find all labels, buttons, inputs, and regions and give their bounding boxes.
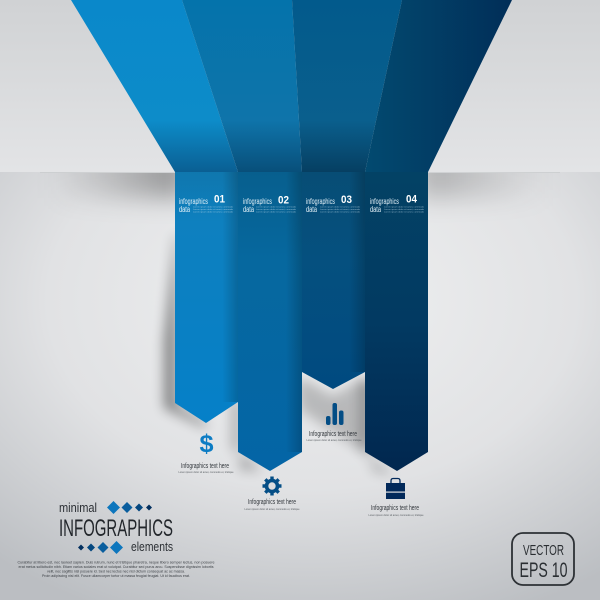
main title: INFOGRAPHICS	[59, 515, 173, 542]
ribbon 2	[238, 172, 302, 471]
ribbon 1: Lorem ipsum dolor sit amet, commodo	[193, 206, 233, 208]
logo block	[18, 500, 214, 578]
ribbon 2: 02	[278, 194, 289, 206]
ribbon 4: Lorem ipsum dolor sit amet, commodo	[384, 208, 424, 211]
caption 4: Lorem ipsum dolor sit amet, commodo et, tristique	[368, 513, 424, 517]
caption 2: Lorem ipsum dolor sit amet, commodo et, tristique	[244, 507, 300, 511]
ribbon 2: data	[243, 205, 254, 214]
ribbon 3: infographics	[306, 197, 335, 206]
caption 2	[244, 499, 300, 511]
ribbon 1: infographics	[179, 197, 208, 206]
caption 4	[368, 505, 424, 517]
band 3	[292, 0, 402, 172]
body paragraph: erat metus sollicitudin nibh. Etiam varius sodales erat ut volutpat. Curabitur sed purus arcu. Suspendisse dignissim lobortis	[18, 565, 214, 569]
band 1	[71, 0, 238, 172]
top fan bands	[71, 0, 512, 172]
ribbon 3: Lorem ipsum dolor sit amet, commodo	[320, 210, 360, 214]
caption 3: Lorem ipsum dolor sit amet, commodo et, tristique	[306, 438, 362, 442]
caption 3	[306, 431, 362, 442]
caption 3: Infographics text here	[309, 431, 357, 438]
ribbon 2: Lorem ipsum dolor sit amet, commodo	[256, 206, 296, 208]
ribbon 3: 03	[341, 194, 352, 206]
icon: briefcase	[386, 478, 405, 499]
ribbon 1: Lorem ipsum dolor sit amet, commodo	[193, 208, 233, 211]
band 2	[182, 0, 302, 172]
top diamonds	[107, 501, 152, 514]
ribbon 1: data	[179, 205, 190, 214]
bottom diamonds	[78, 541, 123, 554]
word: minimal: minimal	[59, 500, 97, 515]
vector EPS 10 badge: EPS 10	[520, 559, 568, 582]
word: elements: elements	[131, 539, 173, 554]
caption 1: Lorem ipsum dolor sit amet, commodo et, tristique	[178, 470, 234, 474]
body paragraph: velit, nec sagittis nisl posuere id. Sed nec lectus nec nisl dictum consequat ac ac massa.	[47, 570, 185, 574]
icon: dollar sign: $	[200, 430, 214, 458]
vector EPS 10 badge	[512, 533, 574, 585]
ribbon 3: data	[306, 205, 317, 214]
ribbon 2: Lorem ipsum dolor sit amet, commodo	[256, 208, 296, 211]
ribbon 4: data	[370, 205, 381, 214]
body paragraph: Curabitur at libero est, nec laoreet sapien. Duis rutrum, nunc et tristique pharetra, neque libero semper lectus, non posuere	[18, 560, 214, 564]
ribbon 4: 04	[406, 194, 418, 206]
ribbon 4	[365, 172, 428, 471]
ribbon 1	[175, 172, 238, 423]
caption 4: Infographics text here	[371, 505, 419, 512]
icon: bar chart	[326, 403, 344, 425]
body paragraph: Proin adipiscing nisl elit. Fusce ullamcorper tortor ut massa feugiat feugiat. Ut id faucibus erat.	[42, 574, 190, 578]
ribbon 4: Lorem ipsum dolor sit amet, commodo	[384, 206, 424, 208]
caption 2: Infographics text here	[248, 499, 296, 506]
ribbon 4: Lorem ipsum dolor sit amet, commodo	[384, 210, 424, 214]
drop shadows beneath ribbons	[164, 235, 395, 476]
body paragraph	[18, 560, 214, 578]
icon: gear	[262, 476, 282, 496]
ribbon 1: Lorem ipsum dolor sit amet, commodo	[193, 210, 233, 214]
ribbon 1: 01	[214, 194, 225, 206]
ribbon 2: Lorem ipsum dolor sit amet, commodo	[256, 210, 296, 214]
caption 1	[178, 463, 234, 474]
ribbon 3	[302, 172, 365, 389]
vector EPS 10 badge: VECTOR	[523, 542, 564, 559]
band 4	[365, 0, 512, 172]
ribbon 3: Lorem ipsum dolor sit amet, commodo	[320, 206, 360, 208]
ribbon 4: infographics	[370, 197, 399, 206]
caption 1: Infographics text here	[181, 463, 229, 470]
ribbon 2: infographics	[243, 197, 272, 206]
ribbon 3: Lorem ipsum dolor sit amet, commodo	[320, 208, 360, 211]
